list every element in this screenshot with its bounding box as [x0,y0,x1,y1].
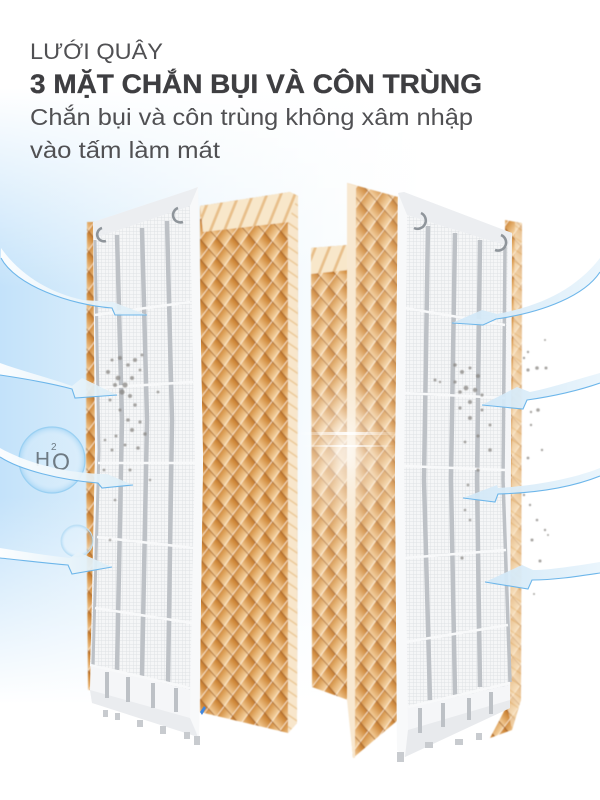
lower short ribs [420,692,491,733]
bottom pegs [103,710,200,745]
blue tab [200,706,206,715]
arrow: right 1 [452,258,600,325]
small bubble [61,525,93,557]
right dust cluster [434,339,549,595]
left filter frame [90,187,206,745]
clips [414,213,506,251]
filter ribs [424,226,510,700]
filter ribs [93,221,172,684]
left dust cluster [103,354,159,541]
filter crossbars [404,308,510,707]
arrow: left 2 [0,363,117,398]
bottom pegs [397,733,482,762]
H2O bubble [19,427,85,493]
subtitle line 2: vào tấm làm mát [30,137,221,163]
eyebrow: lưới quây: LƯỚI QUÂY [30,39,163,64]
H2O bubble: O [52,449,70,476]
arrow: left 1 [1,248,147,315]
subtitle line 1: Chắn bụi và côn trùng không xâm nhập [30,104,473,130]
arrow: right 4 [485,562,600,589]
arrow: left 4 [0,548,112,574]
clips [97,208,183,241]
left cooling pad [200,192,298,733]
right cooling pad [347,183,398,758]
arrow: left 3 [0,448,133,488]
left filter side strip [86,222,98,690]
right filter side strip [490,220,522,738]
arrow: right 2 [482,373,600,409]
filter crossbars [90,302,195,688]
title block [30,39,482,163]
heading: 3 MẶT CHẮN BỤI VÀ CÔN TRÙNG [30,68,482,99]
right filter frame [395,192,512,762]
arrow: right 3 [463,468,600,502]
center cooling pad [311,245,348,700]
center light flare [295,370,400,530]
H2O bubble: H [35,449,50,471]
lower short ribs [107,672,176,712]
H2O bubble: 2 [51,442,57,453]
